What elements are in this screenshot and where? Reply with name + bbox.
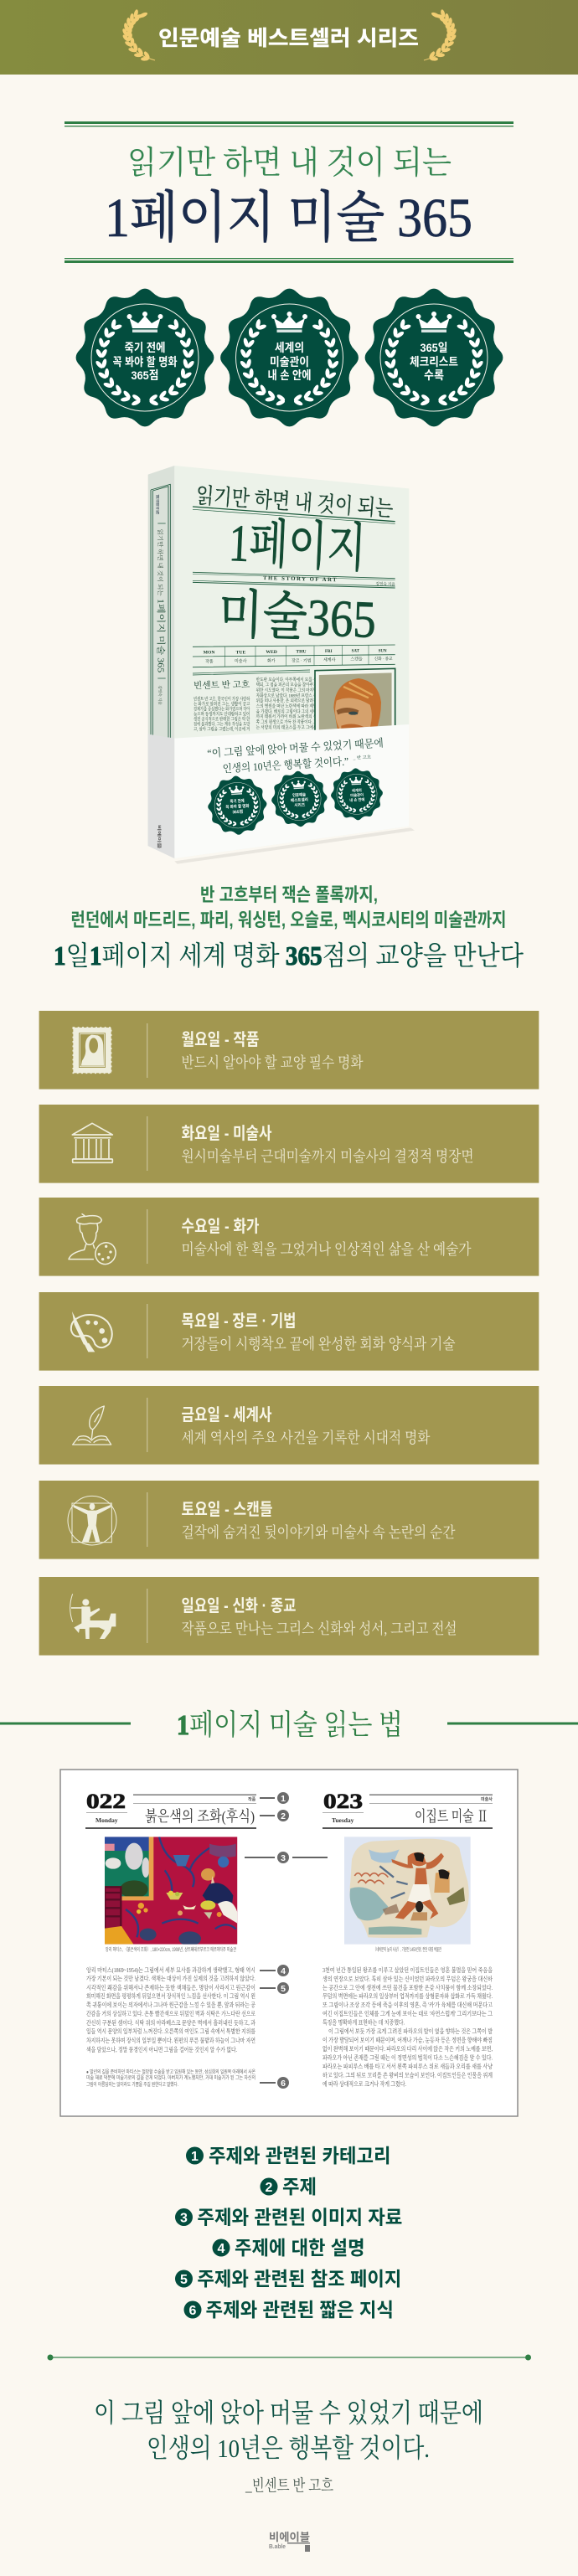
right body text — [323, 1965, 493, 2088]
icon: framed portrait — [73, 1028, 111, 1073]
book: front cover: 1페이지 — [228, 513, 367, 578]
book: body text: 는 화가로 알려진 그는, 생활이 궁고 — [194, 701, 250, 708]
left note: ● 말년의 길을 준비하던 마티스는 절망할 수술을 받고 입원해 있는 동안, 성심회의 일원복 아래에서 사온 — [86, 2069, 255, 2075]
left note — [86, 2069, 255, 2088]
book: weekday table: 화가 — [267, 658, 276, 664]
panel: monday — [39, 1011, 539, 1090]
icon: right laurel — [424, 8, 457, 64]
title: 일요일 - 신화 · 종교 — [181, 1596, 297, 1615]
book: band badge 3: 내 손 안에 — [349, 796, 365, 803]
badge 1: 꼭 봐야 할 명화 — [112, 355, 178, 368]
callout numbers: 6 — [281, 2079, 286, 2089]
intro text — [54, 884, 524, 971]
closing quote — [94, 2398, 483, 2495]
panel: saturday — [39, 1481, 539, 1559]
badge 3: 365일 — [421, 341, 447, 354]
callout numbers: 3 — [281, 1853, 286, 1863]
intro text: 반 고흐부터 잭슨 폴록까지, — [200, 884, 378, 905]
title: 금요일 - 세계사 — [181, 1405, 271, 1425]
badge 2: 세계의 — [275, 341, 304, 354]
title: 화요일 - 미술사 — [181, 1124, 271, 1143]
book: weekday table: 스캔들 — [350, 657, 363, 662]
book: body text: 늦으며 동생까지도 안대람하고 있어 — [194, 711, 250, 718]
book: spine — [148, 466, 174, 858]
legend item 2: 2 — [266, 2181, 273, 2195]
badge 1 — [76, 289, 214, 426]
badge 2 — [220, 289, 359, 426]
callout numbers: 4 — [281, 1966, 286, 1976]
book: body text: 자화상으로 남았다. 1889년 프랑스 측 — [256, 692, 317, 698]
description: 작품으로 만나는 그리스 신화와 성서, 그리고 전설 — [181, 1620, 457, 1637]
legend item 1: 주제와 관련된 카테고리 — [209, 2145, 390, 2166]
book: band badge 2: 베스트셀러 — [291, 796, 308, 803]
book: front cover: 김영숙 지음 — [375, 581, 395, 587]
legend item 2 — [260, 2176, 317, 2197]
title: 수요일 - 화가 — [181, 1217, 260, 1236]
book: body text: 위한 시도였다. 이 작품은 그의 마지막 — [256, 687, 317, 693]
book: weekday table: 신화 · 종교 — [374, 656, 393, 662]
right page header: 023 — [323, 1790, 363, 1813]
callout numbers: 5 — [281, 1984, 286, 1994]
book: body text: 고, 살아 그림을 그렸는데, 이곳에 겨 — [194, 726, 250, 733]
book: band badge 1 — [206, 775, 268, 837]
left body text: 간감을 거의 상실하고 있다. 온통 빨간색으로 뒤덮인 벽과 식탁은 가느다란 선으로 — [86, 2009, 256, 2017]
right body text: 무덤의 벽면에는 파라오의 일상부터 업적까지를 상형문자와 삽화로 가득 채웠다. — [323, 1991, 493, 2000]
book: front cover: 미술365 — [218, 585, 377, 649]
legend item 6: 6 — [189, 2304, 197, 2318]
left caption: 앙리 마티스, 〈붉은색의 조화〉, 180×220cm, 1908년, 상트페테르부르크 에르미타주 미술관 — [106, 1946, 236, 1953]
right page header: Tuesday — [332, 1816, 354, 1824]
left note: 미술 재료 덕분에 미술가로의 길을 걷게 되었다. 아버지가 계노했지만, 거대 미술가가 된 그는 자신의 — [86, 2074, 255, 2081]
right body text: 하고 있다. 그의 뒤로 꼬리를 쓴 왕비의 모습이 보인다. 이집트인들은 인물을 위계 — [323, 2070, 493, 2079]
panel: thursday — [39, 1292, 539, 1371]
left body text: 앙리 마티스(1869~1954)는 그림에서 세부 묘사를 과감하게 생략했고, 형태 역시 — [86, 1965, 255, 1974]
icon: vitruvian man — [68, 1496, 116, 1545]
badge 3: 수록 — [424, 368, 444, 382]
book: shadow — [174, 827, 415, 864]
title block — [65, 121, 513, 263]
legend item 4: 4 — [218, 2242, 225, 2256]
book: weekday table: THU — [296, 650, 307, 655]
right page header: 미술사 — [481, 1796, 493, 1802]
publisher logo: 비에이블 — [269, 2531, 310, 2543]
description: 걸작에 숨겨진 뒷이야기와 미술사 속 논란의 순간 — [181, 1523, 456, 1541]
legend list — [175, 2145, 402, 2321]
book: body text: 는 서양의 미의 태초스를 두고 그에서 — [256, 724, 317, 730]
book: spine: 읽기만 하면 내 것이 되는 — [157, 529, 164, 596]
badge 1: 365점 — [131, 368, 159, 382]
panel: wednesday — [39, 1198, 539, 1276]
left body text: 차지하지는 못하며 장식의 일부일 뿐이다. 왼편의 푸른 풀밭과 하늘이 그나마 자연 — [86, 2036, 255, 2044]
closing quote: 인생의 10년은 행복할 것이다. — [147, 2434, 430, 2463]
legend item 3: 3 — [180, 2211, 188, 2226]
book: spine: 1페이지 미술 365 — [155, 599, 166, 672]
publisher logo: B.able — [269, 2544, 286, 2550]
book: front cover: 빈센트 반 고흐 — [194, 679, 250, 691]
right body text: 여긴 이집트인들은 인체를 그게 눈에 보이는 대로 '자연스럽게' 그리기보다는 그 — [323, 2009, 493, 2017]
intro text: 런던에서 마드리드, 파리, 워싱턴, 오슬로, 멕시코시티의 미술관까지 — [70, 909, 506, 930]
description: 원시미술부터 근대미술까지 미술사의 결정적 명장면 — [181, 1147, 474, 1165]
legend item 1: 1 — [191, 2150, 199, 2164]
right body text: 또 그림이나 조상 조각 등에 죽음 이후의 영혼, 즉 '카'가 육체를 대신해 머문다고 — [323, 2000, 493, 2008]
left body text: 쪽 귀퉁이에 보이는 의자에서나 그나마 원근감을 느낄 수 있을 뿐, 앞과 뒤라는 공 — [86, 2000, 256, 2008]
sample spread — [60, 1770, 518, 2116]
intro text: 1일1페이지 세계 명화 365점의 교양을 만난다 — [54, 940, 524, 971]
book cover image — [148, 466, 415, 864]
header band — [0, 0, 578, 75]
header text: 인문예술 베스트셀러 시리즈 — [158, 27, 419, 50]
book: front cover — [174, 466, 409, 739]
book: belly band front: “이 그림 앞에 앉아 머물 수 있었기 때문에 — [207, 737, 384, 760]
book: band badge 2: 인문예술 — [292, 791, 307, 798]
left body text: 색을 담았으나, 정말 풍경인지 아니면 그림을 걸어둔 것인지 알 수가 없다. — [86, 2045, 237, 2053]
section heading — [0, 1709, 578, 1741]
description: 반드시 알아야 할 교양 필수 명화 — [181, 1054, 364, 1071]
right body text: 는 공간으로 그 안에 생전에 쓰던 물건을 포함한 온갖 사치품이 함께 소장되었다. — [323, 1983, 493, 1991]
panel: sunday — [39, 1577, 539, 1656]
book: weekday table: 세계사 — [323, 657, 336, 662]
right body text: 없이 완벽해 보이기 때문이다. 파라오의 다리 사이에 앉은 작은 키의 노예를 보면, — [323, 2044, 493, 2053]
badge 3: 체크리스트 — [410, 355, 458, 368]
book: spine: THE STORY OF ART — [155, 495, 159, 514]
left note: 그림이 아름답지는 않더라도 기쁨을 주길 원한다고 말했다. — [86, 2081, 178, 2088]
title: 월요일 - 작품 — [181, 1030, 260, 1049]
callout numbers — [245, 1792, 328, 2089]
book: body text: 생전 공식적으로 판매한 그림은 딱 한 — [194, 716, 250, 723]
right body text: 생의 연장으로 보았다. 특히 살아 있는 신이었던 파라오의 무덤은 왕궁을 대신하 — [323, 1975, 493, 1983]
book: weekday table: FRI — [325, 650, 333, 654]
right body text: 이 가장 발달되어 보이기 때문이며, 어깨나 가슴, 눈동자 등은 정면을 향해야 빠짐 — [323, 2035, 493, 2043]
book: body text: 경제가를 중심했다는 화가였으며 작아 — [194, 706, 250, 713]
book: belly band spine — [148, 734, 174, 858]
book: weekday table: 작품 — [205, 659, 214, 665]
left body text: 가장 기본이 되는 것만 남겼다. 색채는 대상이 가진 실제의 것을 고려하지 않았다. — [86, 1974, 255, 1982]
icon: centaur archer — [70, 1594, 116, 1639]
icon: left laurel — [121, 8, 155, 64]
quote attribution: _빈센트 반 고흐 — [245, 2476, 333, 2495]
book: weekday table: MON — [204, 651, 215, 656]
book: body text: 스의 병원을 떠난 노란색에 따라 제달 — [256, 703, 317, 709]
book: body text: 반도판 모습이다. 아무쪽에서 모를 선 — [256, 676, 317, 683]
left page header: 022 — [86, 1790, 126, 1813]
book: band badge 2 — [270, 770, 328, 828]
book: body text: 택되, 그 점을 피곤의 모습을 찾아주기 — [256, 682, 317, 688]
book: portrait — [315, 668, 395, 733]
book: body text: 위를 떠나 사용한, 온 외곽으로 달려진 — [256, 698, 317, 704]
left page header: Monday — [95, 1816, 118, 1824]
icon: painter — [69, 1214, 119, 1267]
icon: quill and book — [73, 1406, 111, 1445]
legend item 5: 5 — [180, 2273, 188, 2287]
panel: tuesday — [39, 1105, 539, 1183]
right body text: 특징을 명확하게 표현하는 데 치중했다. — [323, 2018, 405, 2027]
right body text: 에 따라 상대적으로 크거나 작게 그렸다. — [323, 2079, 406, 2088]
icon: palette and brush — [71, 1311, 112, 1352]
left page header — [85, 1790, 256, 1829]
book: body text: 빈센트 반 고흐. 한국인이 가장 사랑하 — [194, 696, 250, 703]
right page header — [323, 1790, 493, 1829]
badge 2: 미술관이 — [270, 355, 309, 368]
left body text: 시각적인 쾌감을 위해서나 존재하는 듯한 색채들은, 명암이 사라지고 원근감이 — [86, 1983, 255, 1991]
book: weekday table: SAT — [352, 650, 360, 654]
panel: friday — [39, 1386, 539, 1465]
description: 세계 역사의 주요 사건을 기록한 시대적 명화 — [181, 1429, 431, 1446]
book: publisher logo on spine: 비에이블 — [156, 825, 162, 850]
book: front cover: 읽기만 하면 내 것이 되는 — [195, 483, 394, 521]
title: main: 1페이지 미술 365 — [105, 188, 472, 249]
left body text: 일들 역시 문양의 일부처럼 느껴진다. 오른쪽의 여인도 그림 속에서 특별한 지위를 — [86, 2027, 256, 2035]
publisher logo — [269, 2531, 310, 2552]
book: band badge 3 — [329, 767, 384, 822]
title: subtitle: 읽기만 하면 내 것이 되는 — [127, 146, 452, 181]
right body text: 3천여 년간 통일된 왕조를 이루고 살았던 이집트인들은 영혼 불멸을 믿어 죽음을 — [323, 1965, 493, 1974]
book: band badge 1: 죽기 전에 — [230, 798, 245, 805]
right body text: 파라오가 아닌 존재를 그릴 때는 이 정면성의 법칙이 다소 느슨해짐을 알 수 있다. — [323, 2053, 493, 2062]
left page header: 붉은색의 조화(후식) — [145, 1807, 255, 1826]
legend item 6: 주제와 관련된 짧은 지식 — [206, 2299, 394, 2321]
book: belly band front: 인생의 10년은 행복할 것이다.” — [222, 755, 349, 775]
title: 토요일 - 스캔들 — [181, 1500, 273, 1519]
right body text: 파라오는 파피루스 배를 타고 서서 왼쪽 파피루스 위로 새들과 오리를 새를 사냥 — [323, 2062, 493, 2070]
callout numbers: 2 — [281, 1811, 286, 1821]
left page header: 작품 — [248, 1796, 256, 1802]
right body text: 이 그림에서 보듯 가장 크게 그려진 파라오의 발이 옆을 향하는 것은 그쪽이 발 — [328, 2027, 493, 2035]
left body text — [86, 1965, 256, 2053]
book: weekday table: TUE — [236, 650, 246, 655]
book: band badge 1: 꼭 봐야 할 명화 — [225, 803, 250, 810]
description: 미술사에 한 획을 그었거나 인상적인 삶을 산 예술가 — [181, 1240, 472, 1258]
left body text: 간신히 구분된 셈이다. 식탁 위의 아라베스크 문양은 벽에서 흘러내린 듯하고, 과 — [86, 2018, 256, 2027]
book: body text: 을 가졌다. 배로의 그림이다 그의 세력 — [256, 708, 317, 714]
badge 1: 죽기 전에 — [124, 341, 166, 354]
badge 2: 내 손 안에 — [268, 368, 312, 382]
left body text: 희미해진 화면을 평평하게 뒤덮으면서 장식적인 느낌을 선사한다. 이 그림 역시 왼 — [86, 1991, 255, 2000]
book: weekday table: WED — [266, 650, 277, 655]
painting: Egyptian fresco — [344, 1837, 471, 1945]
right page header: 이집트 미술 Ⅱ — [415, 1808, 488, 1825]
legend item 3: 주제와 관련된 이미지 자료 — [197, 2206, 402, 2228]
book: body text: 점에 불과했다. 그는 계유 작성을 도망 — [194, 721, 250, 728]
book: belly band front — [174, 724, 409, 858]
book: weekday table: 장르 · 기법 — [292, 657, 312, 663]
badge 3 — [365, 289, 503, 426]
callout numbers: 1 — [281, 1794, 286, 1804]
book: weekday table — [193, 645, 395, 667]
book: body text: 까지 태워서 가까이 바위 노란색의 색 — [256, 714, 317, 720]
book: band badge 1: 365점 — [232, 809, 244, 815]
legend item 5: 주제와 관련된 참조 페이지 — [197, 2268, 401, 2290]
book: band badge 3: 미술관이 — [350, 792, 364, 798]
legend item 2: 주제 — [282, 2176, 317, 2197]
book: weekday table: SUN — [379, 649, 387, 653]
book: front cover: THE STORY OF ART — [263, 575, 337, 583]
legend item 4: 주제에 대한 설명 — [235, 2237, 365, 2259]
right caption: 〈네바문의 늪지 사냥〉, 기원전 1450년경, 런던 대영 박물관 — [374, 1946, 441, 1953]
painting: Matisse harmony in red — [105, 1837, 237, 1946]
closing quote: 이 그림 앞에 앉아 머물 수 있었기 때문에 — [94, 2398, 483, 2428]
section heading: 1페이지 미술 읽는 법 — [177, 1709, 403, 1741]
book: body text: 쪽 그의 평생으로 가득 찬 작품이다. 그 — [256, 719, 317, 725]
book: belly band front: _ 반 고흐 — [352, 754, 372, 761]
book: weekday table: 미술사 — [235, 658, 247, 664]
book: band badge 2: 시리즈 — [294, 801, 306, 808]
divider with end dots — [47, 2355, 531, 2360]
icon: temple — [72, 1123, 112, 1162]
badges row — [76, 289, 503, 426]
book: spine: 김영숙 지음 — [157, 685, 163, 705]
title: 목요일 - 장르 · 기법 — [181, 1311, 297, 1331]
description: 거장들이 시행착오 끝에 완성한 회화 양식과 기술 — [181, 1335, 456, 1352]
book: body text — [194, 676, 317, 733]
book: band badge 3: 세계의 — [352, 787, 362, 794]
